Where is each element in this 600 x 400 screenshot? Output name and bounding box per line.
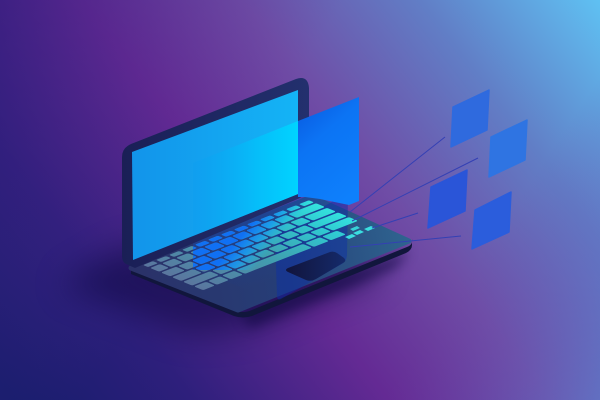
keyboard [143,200,369,290]
data tile 1 [451,90,489,147]
data tile 2 [489,120,527,177]
laptop shadow [60,220,410,335]
laptop [122,78,412,318]
laptop screen [132,90,298,260]
data tile 4 [472,192,511,249]
translucent floating panel [193,97,359,236]
blue-lit keys under the panel [193,202,306,270]
panel reflection on keyboard [193,197,338,274]
arrow keys [345,226,375,239]
touchpad [286,252,345,281]
connection lines [350,137,478,247]
laptop lid [122,78,309,268]
translucent overlay on trackpad [275,194,348,300]
laptop base [131,197,412,318]
data tile 3 [428,170,467,228]
